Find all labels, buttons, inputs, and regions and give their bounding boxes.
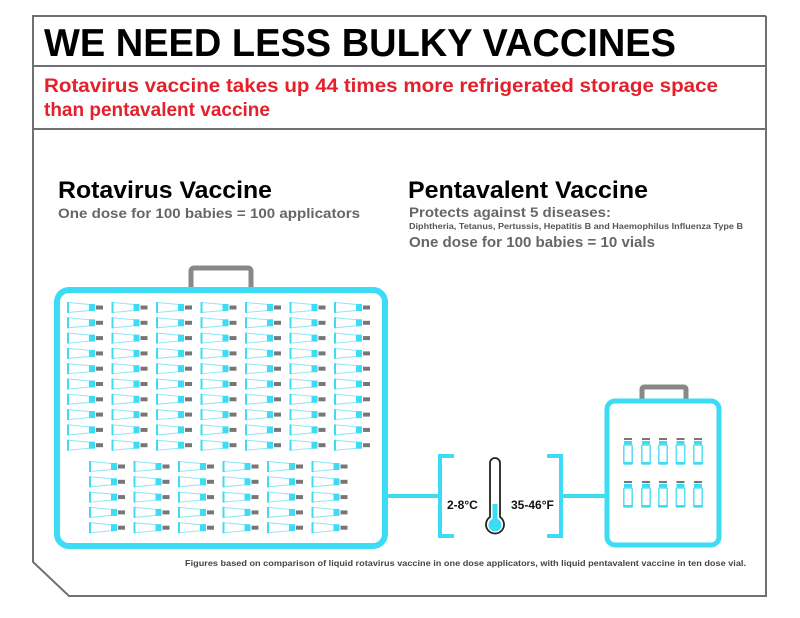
title: WE NEED LESS BULKY VACCINES [44,22,676,65]
rotavirus case [57,268,385,546]
footnote: Figures based on comparison of liquid rotavirus vaccine in one dose applicators, with liquid pentavalent vaccine in ten dose vial. [185,558,746,568]
temperature bracket: 35-46°F [511,498,554,512]
heading: pentavalent: Protects against 5 diseases: [409,204,611,220]
connector lines [386,494,605,498]
subtitle: Rotavirus vaccine takes up 44 times more refrigerated storage space [44,76,718,97]
heading: pentavalent: Diphtheria, Tetanus, Pertussis, Hepatitis B and Haemophilus Influenza Type B [409,222,743,231]
heading: rotavirus: Rotavirus Vaccine [58,177,272,204]
temperature bracket [440,456,561,536]
applicators: 100 [67,302,370,533]
vials: 10 [624,438,702,508]
heading: pentavalent: One dose for 100 babies = 10 vials [409,234,655,251]
heading: pentavalent [408,177,743,251]
heading: rotavirus: One dose for 100 babies = 100 applicators [58,205,360,221]
temperature bracket: 2-8°C [447,498,478,512]
icon: thermometer [486,458,504,533]
subtitle: than pentavalent vaccine [44,100,270,121]
pentavalent case [607,387,719,545]
heading: pentavalent: Pentavalent Vaccine [408,177,648,204]
subtitle [44,76,718,121]
heading: rotavirus [58,177,360,221]
